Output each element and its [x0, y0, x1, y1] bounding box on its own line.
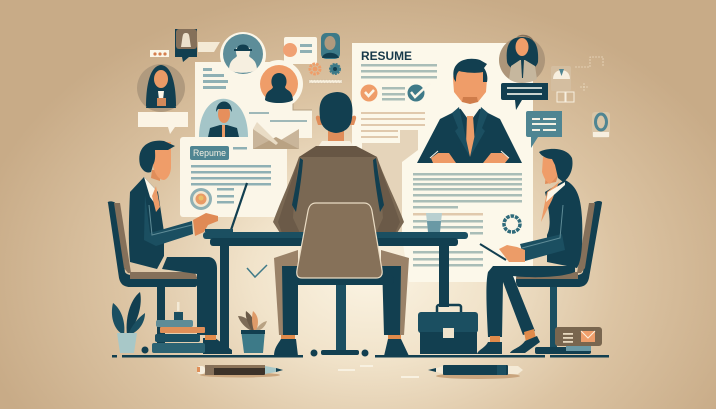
speech bubble teal: [526, 111, 562, 148]
panel: main resume document: [352, 43, 533, 282]
icon: small tag: [551, 66, 574, 102]
icon: plant with white pot: [112, 292, 145, 353]
person: right seated with clipboard: [477, 149, 602, 354]
icon: man avatar: [199, 99, 248, 137]
icon: mail tag: [555, 327, 602, 351]
candidate portrait: [417, 59, 522, 163]
icon: stacked books: [152, 302, 205, 353]
icon: teal check: [408, 83, 430, 102]
icon: ring tag: [592, 112, 610, 138]
icon: badge tag: [175, 29, 197, 62]
icon: silhouette avatar: [255, 60, 303, 108]
icon: gears: [309, 64, 342, 83]
icon: hat avatar: [220, 32, 266, 78]
icon: woman top-right avatar: [499, 35, 545, 83]
icon: woman avatar: [137, 64, 185, 112]
center chair: [287, 203, 394, 356]
icon: check mark: [247, 265, 267, 277]
icon: orange check: [360, 84, 378, 102]
icon: teal profile tag: [321, 33, 340, 59]
icon: water glass: [426, 213, 442, 232]
panel: repume document: [180, 137, 287, 217]
icon: briefcase: [418, 305, 478, 354]
icon: small potted plant: [238, 311, 267, 353]
speech bubble dark: [501, 83, 548, 110]
repume label: Repume: [193, 148, 226, 158]
icon: target: [190, 188, 212, 210]
icon: laptop: [205, 183, 247, 232]
person: center seen from behind: [273, 92, 409, 356]
icon: seal: [504, 216, 520, 232]
icon: envelope: [253, 122, 299, 149]
icon: left pen: [197, 365, 283, 378]
floor line: [112, 355, 609, 358]
floor dashes: [338, 365, 419, 378]
icon: right pen: [428, 365, 523, 379]
panel: back document left: [195, 42, 312, 138]
repume label: [190, 146, 229, 160]
icon: contact card: [283, 37, 317, 64]
speech bubble under woman: [138, 112, 188, 134]
person: left seated with laptop: [108, 141, 232, 354]
resume title: RESUME: [361, 51, 412, 63]
table: [203, 232, 468, 348]
icon: three dots chat: [150, 50, 169, 57]
panel: tan shaded block: [362, 130, 418, 232]
